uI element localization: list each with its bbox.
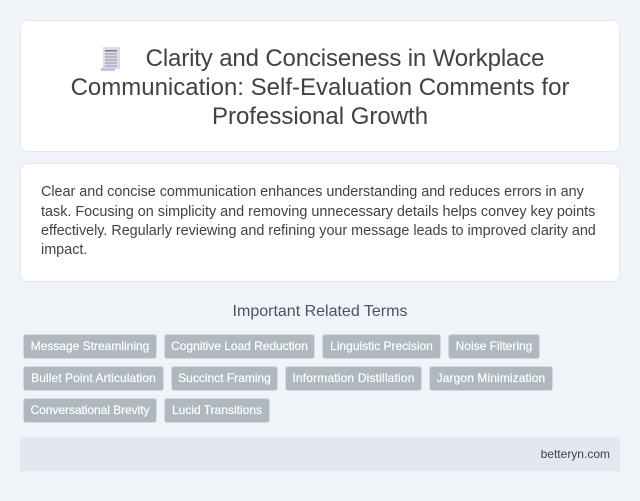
tag: Lucid Transitions: Lucid Transitions xyxy=(172,403,262,417)
tag: Linguistic Precision xyxy=(322,334,441,359)
tag: Conversational Brevity: Conversational Brevity xyxy=(31,403,149,417)
tag: Conversational Brevity xyxy=(23,398,157,423)
tag: Cognitive Load Reduction xyxy=(164,334,315,359)
tag: Linguistic Precision: Linguistic Precision xyxy=(330,339,433,353)
tag list xyxy=(23,334,553,423)
tag: Information Distillation: Information Distillation xyxy=(292,371,415,385)
description text: effectively. Regularly reviewing and refining your message leads to improved clarity and xyxy=(41,223,596,239)
tag: Noise Filtering xyxy=(448,334,540,359)
tag: Information Distillation xyxy=(285,366,422,391)
footer: site name: betteryn.com xyxy=(541,447,610,461)
tag: Jargon Minimization: Jargon Minimization xyxy=(437,371,545,385)
tag: Cognitive Load Reduction: Cognitive Load Reduction xyxy=(171,339,308,353)
tag: Succinct Framing xyxy=(171,366,278,391)
icon: document scroll xyxy=(101,47,120,71)
tag: Succinct Framing: Succinct Framing xyxy=(178,371,271,385)
tag: Lucid Transitions xyxy=(164,398,270,423)
tag: Jargon Minimization xyxy=(429,366,553,391)
title: Communication: Self-Evaluation Comments for xyxy=(71,74,569,101)
panel: title card xyxy=(20,20,620,152)
heading: important related terms: Important Related Terms xyxy=(233,303,407,320)
tag: Noise Filtering: Noise Filtering xyxy=(456,339,532,353)
description text: task. Focusing on simplicity and removing unnecessary details helps convey key points xyxy=(41,204,595,220)
title: Professional Growth xyxy=(212,103,428,130)
tag: Message Streamlining: Message Streamlining xyxy=(31,339,149,353)
tag: Message Streamlining xyxy=(23,334,157,359)
description text xyxy=(41,184,596,258)
panel: description card xyxy=(20,163,620,282)
tag: Bullet Point Articulation xyxy=(23,366,164,391)
tag: Bullet Point Articulation: Bullet Point Articulation xyxy=(31,371,156,385)
footer bar xyxy=(20,437,620,471)
description text: Clear and concise communication enhances understanding and reduces errors in any xyxy=(41,184,584,200)
title: Clarity and Conciseness in Workplace xyxy=(146,45,544,72)
description text: impact. xyxy=(41,242,87,258)
title xyxy=(71,45,570,130)
